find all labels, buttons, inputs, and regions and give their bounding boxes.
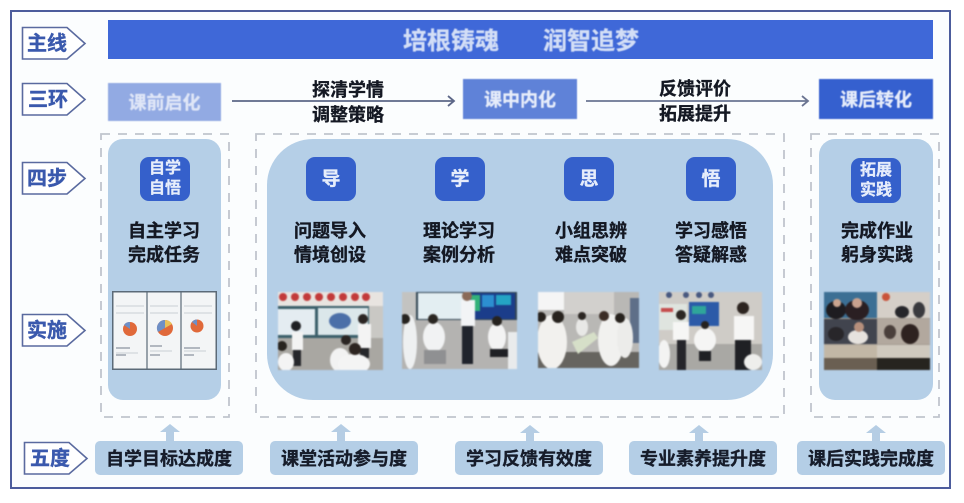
up arrow 2	[331, 424, 351, 441]
icon: 思	[564, 157, 614, 201]
arrow: 课中 to 课后	[586, 95, 810, 107]
text: 理论学习 案例分析	[423, 220, 495, 265]
text: 学习感悟 答疑解惑: 学习感悟	[675, 221, 747, 241]
image: classroom photo 4	[658, 291, 763, 371]
text: 理论学习 案例分析: 案例分析	[423, 245, 495, 265]
text: 小组思辨 难点突破	[555, 221, 627, 265]
icon: 拓展实践: 拓展	[860, 162, 892, 178]
metric: 课堂活动参与度	[270, 441, 418, 475]
image: online meeting grid	[823, 291, 931, 371]
icon: 思: 思	[579, 168, 598, 190]
title banner	[108, 20, 933, 59]
text: 完成作业 躬身实践: 躬身实践	[841, 245, 913, 265]
icon: 悟: 悟	[701, 168, 720, 190]
text: 小组思辨 难点突破: 难点突破	[555, 245, 627, 265]
label: 三环: 三环	[28, 89, 68, 111]
ring: 课中内化: 课中内化	[484, 90, 556, 110]
dashed group: in-class	[255, 133, 785, 418]
icon: 学: 学	[450, 168, 470, 190]
up arrow 1	[160, 424, 180, 441]
ring: 课后转化: 课后转化	[840, 90, 912, 110]
text: 自主学习 完成任务	[128, 220, 200, 265]
panel: pre-class	[108, 139, 221, 400]
ring: 课前启化: 课前启化	[128, 93, 200, 113]
title: right phrase: 润智追梦	[543, 28, 639, 55]
icon: 导: 导	[321, 168, 340, 190]
up arrow 4	[689, 425, 709, 441]
arrow text: 反馈评价 拓展提升	[659, 79, 731, 124]
label: 五度	[24, 442, 88, 475]
arrow text: 探清学情 调整策略: 探清学情	[312, 80, 384, 100]
icon: 导	[306, 157, 356, 201]
image: classroom photo 1	[277, 292, 384, 371]
arrow text: 探清学情 调整策略: 调整策略	[312, 105, 384, 125]
label: 实施: 实施	[27, 318, 67, 342]
label: 实施	[22, 314, 86, 347]
label: 主线: 主线	[27, 32, 67, 55]
text: 理论学习 案例分析: 理论学习	[423, 221, 495, 241]
label: 主线	[22, 26, 86, 60]
metric: 课后实践完成度: 课后实践完成度	[808, 449, 934, 469]
icon: 拓展实践	[851, 158, 901, 203]
metric: 专业素养提升度: 专业素养提升度	[640, 449, 766, 469]
text: 问题导入 情境创设: 情境创设	[294, 245, 366, 265]
metric: 学习反馈有效度: 学习反馈有效度	[466, 449, 592, 469]
icon: 自学自悟: 自学	[149, 160, 181, 177]
image: phone screenshots with pie charts	[112, 291, 217, 370]
ring: 课中内化	[463, 79, 577, 119]
panel: in-class	[267, 139, 773, 400]
icon: 自学自悟: 自悟	[149, 180, 181, 197]
image: classroom photo 3	[537, 291, 640, 369]
dashed group: pre-class	[100, 133, 230, 418]
icon: 悟	[686, 157, 736, 201]
title: left phrase: 培根铸魂	[403, 28, 499, 55]
text: 学习感悟 答疑解惑: 答疑解惑	[675, 245, 747, 265]
text: 问题导入 情境创设: 问题导入	[294, 221, 366, 241]
arrow text: 探清学情 调整策略	[312, 80, 384, 125]
text: 问题导入 情境创设	[294, 221, 366, 265]
text: 自主学习 完成任务: 完成任务	[128, 245, 200, 265]
icon: 学	[435, 157, 485, 201]
arrow: 课前 to 课中	[232, 95, 456, 107]
label: 三环	[22, 82, 86, 116]
label: 五度: 五度	[30, 447, 70, 470]
metric: 课堂活动参与度: 课堂活动参与度	[281, 449, 407, 469]
panel: post-class	[819, 139, 933, 400]
metric: 课后实践完成度	[797, 441, 945, 475]
icon: 自学自悟	[140, 157, 190, 201]
up arrow 3	[520, 425, 540, 441]
metric: 自学目标达成度: 自学目标达成度	[106, 449, 232, 469]
text: 学习感悟 答疑解惑	[675, 220, 747, 265]
ring: 课前启化	[108, 83, 221, 121]
metric: 专业素养提升度	[629, 441, 777, 475]
image: classroom photo 2	[401, 291, 518, 370]
label: 四步	[22, 162, 86, 195]
ring: 课后转化	[819, 79, 933, 119]
text: 完成作业 躬身实践	[841, 220, 913, 265]
text: 小组思辨 难点突破: 小组思辨	[555, 221, 627, 241]
dashed group: post-class	[810, 133, 940, 418]
up arrow 5	[866, 425, 886, 441]
arrow text: 反馈评价 拓展提升: 反馈评价	[659, 79, 731, 99]
metric: 学习反馈有效度	[455, 441, 603, 475]
icon: 拓展实践: 实践	[860, 182, 892, 198]
metric: 自学目标达成度	[95, 441, 243, 475]
label: 四步: 四步	[27, 167, 67, 190]
text: 自主学习 完成任务: 自主学习	[128, 221, 200, 241]
text: 完成作业 躬身实践: 完成作业	[841, 221, 913, 241]
arrow text: 反馈评价 拓展提升: 拓展提升	[659, 104, 731, 124]
